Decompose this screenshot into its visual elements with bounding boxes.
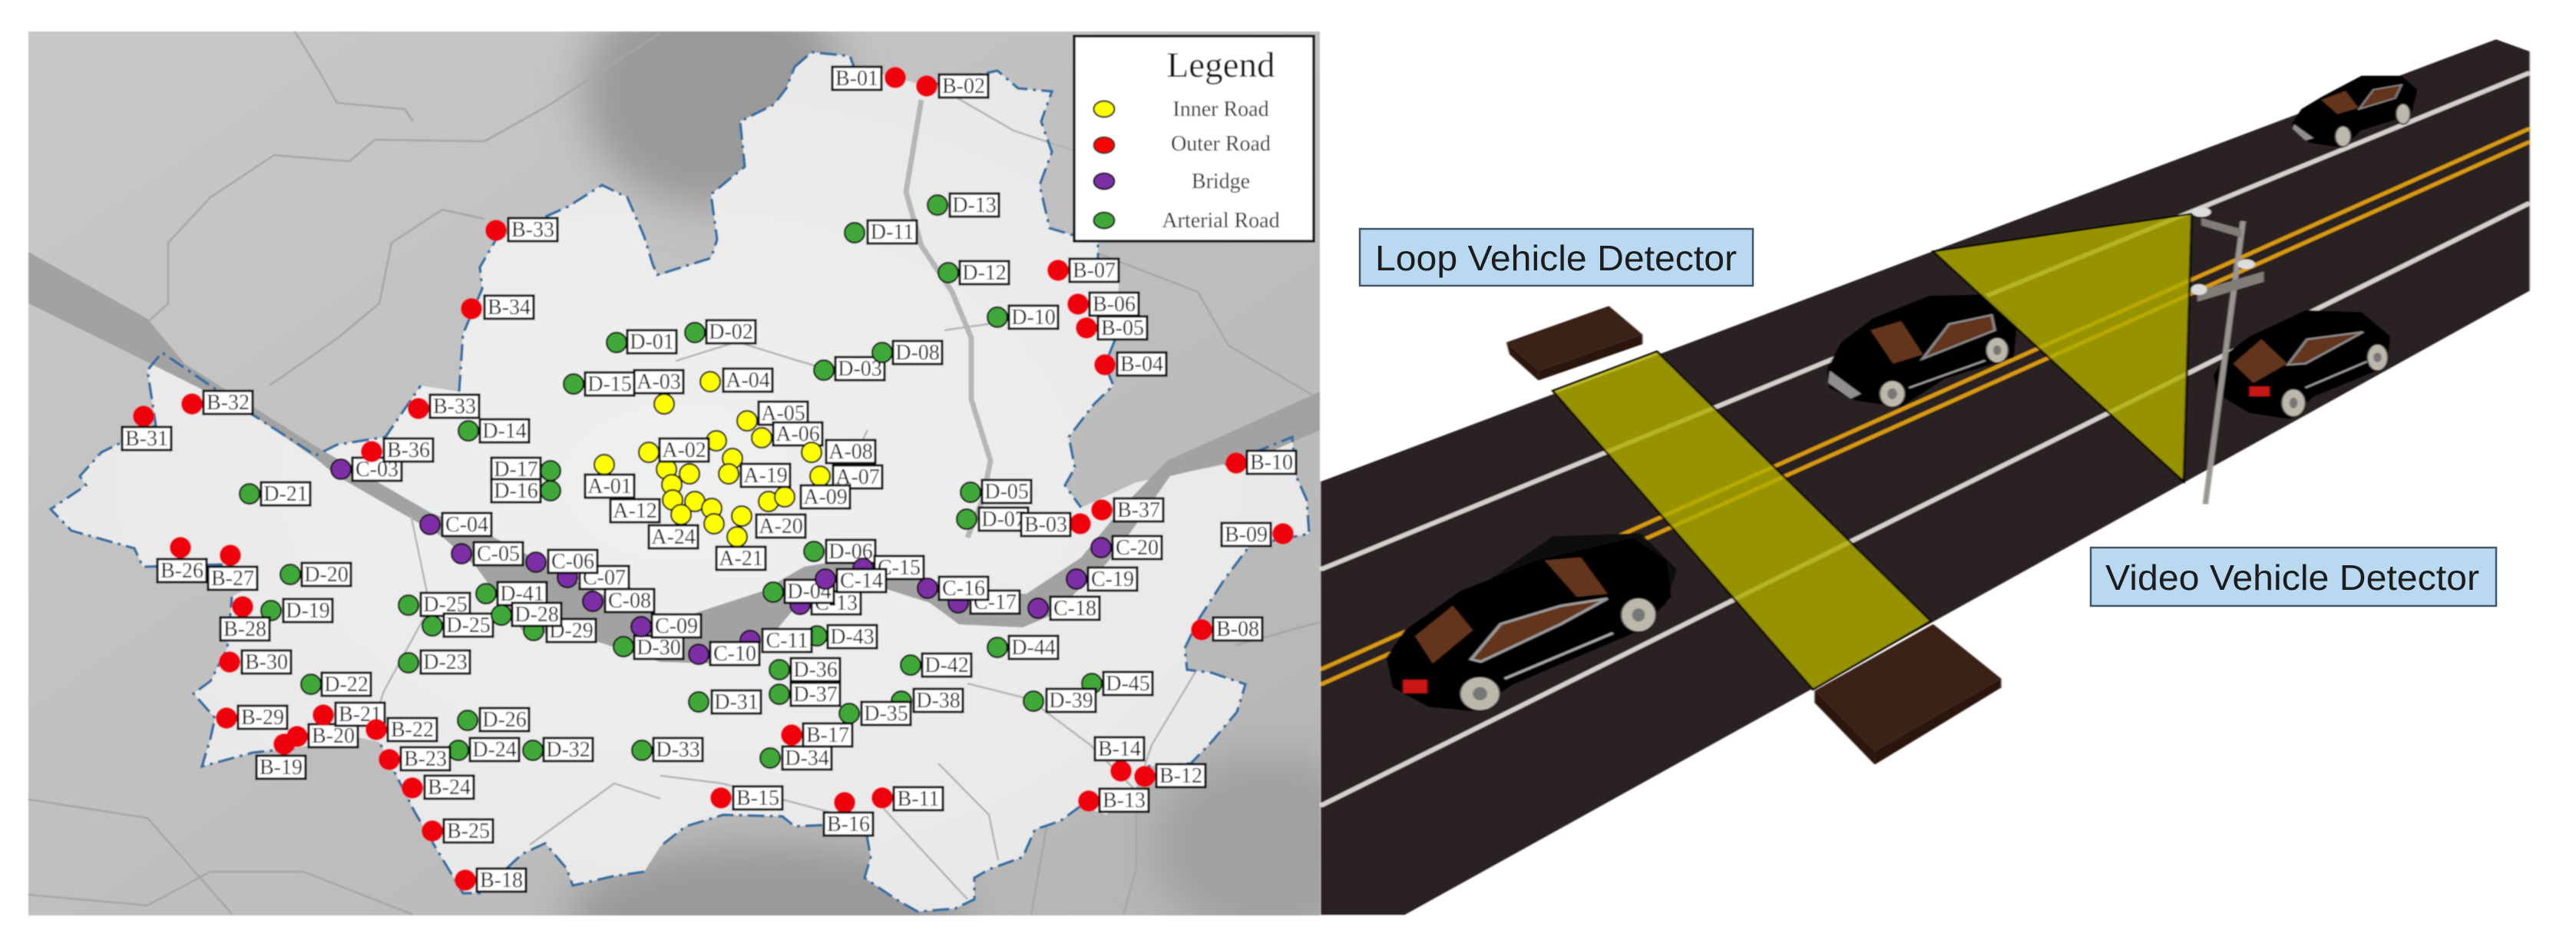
D-31: [689, 690, 761, 714]
D-25: D-25: [423, 593, 468, 617]
A-07: [810, 465, 882, 489]
D-33: [632, 738, 703, 762]
panel: road detector diagram: [1321, 39, 2530, 915]
B-01: B-01: [835, 67, 878, 91]
B-24: [402, 776, 474, 799]
B-10: [1225, 451, 1296, 475]
D-42: [901, 654, 971, 677]
A-07: A-07: [835, 465, 880, 489]
B-03: B-03: [1024, 513, 1067, 537]
B-15: B-15: [736, 786, 779, 810]
B-20: B-20: [312, 724, 355, 748]
D-41: D-41: [500, 582, 544, 606]
B-02: B-02: [942, 74, 985, 98]
D-30: D-30: [637, 636, 681, 660]
B-13: [1078, 789, 1149, 813]
D-34: D-34: [785, 746, 829, 770]
B-27: B-27: [211, 567, 254, 591]
C-06: C-06: [551, 550, 594, 574]
C-06: [526, 550, 597, 574]
D-41: [476, 582, 547, 606]
A-20: [732, 506, 805, 538]
C-04: [420, 513, 491, 537]
B-34: [461, 296, 534, 319]
B-19: [256, 733, 306, 780]
A-20: A-20: [759, 515, 803, 538]
D-38: D-38: [916, 689, 961, 713]
C-03: C-03: [355, 458, 398, 482]
B-28: B-28: [223, 617, 266, 641]
B-14: [1095, 737, 1144, 782]
D-15: [564, 372, 634, 396]
legend: outer road: [1093, 132, 1271, 156]
car: top far lane: [2291, 76, 2418, 147]
inner roads: [369, 97, 1198, 899]
B-31: [122, 405, 171, 451]
B-33: [485, 218, 557, 242]
D-39: D-39: [1049, 689, 1093, 713]
C-05: C-05: [477, 542, 520, 566]
D-23: D-23: [423, 650, 468, 674]
D-11: [845, 220, 917, 244]
D-19: [261, 599, 332, 623]
B-23: B-23: [404, 747, 447, 771]
B-10: B-10: [1250, 451, 1293, 475]
B-12: B-12: [1159, 764, 1202, 788]
D-05: D-05: [984, 480, 1029, 504]
B-04: B-04: [1120, 353, 1163, 376]
B-36: B-36: [387, 439, 430, 462]
label: Video Vehicle Detector: Video Vehicle Detector: [2105, 558, 2479, 597]
A-05: [737, 402, 808, 431]
D-11: D-11: [871, 220, 914, 244]
C-08: [583, 589, 654, 613]
panel: Seoul detector map: [28, 0, 1382, 950]
D-26: D-26: [482, 708, 527, 732]
C-20: [1091, 536, 1162, 560]
B-37: [1091, 498, 1163, 522]
D-08: D-08: [895, 341, 940, 365]
B-26: [157, 537, 207, 583]
C-17: C-17: [974, 591, 1017, 614]
B-19: B-19: [260, 756, 303, 780]
D-45: D-45: [1106, 672, 1150, 696]
B-20: [286, 724, 358, 748]
C-20: C-20: [1116, 536, 1159, 560]
B-03: [1021, 513, 1091, 537]
B-18: [455, 869, 526, 892]
C-15: C-15: [878, 556, 921, 580]
C-11: [740, 629, 812, 653]
B-15: [710, 786, 782, 810]
D-12: D-12: [962, 261, 1007, 285]
D-23: [398, 650, 470, 674]
legend title: Legend: [1167, 45, 1275, 85]
C-17: [948, 591, 1020, 614]
D-36: D-36: [793, 658, 838, 682]
B-07: [1047, 259, 1119, 283]
B-05: [1076, 316, 1147, 340]
B-33 lower: [408, 395, 479, 419]
C-13: [790, 591, 861, 615]
B-22: B-22: [391, 718, 434, 742]
D-06: [804, 540, 875, 564]
D-12: [938, 261, 1009, 285]
B-04: [1094, 353, 1166, 376]
loop detector cabinet, far side: [1506, 306, 1642, 380]
B-30: B-30: [245, 650, 288, 674]
C-09: C-09: [655, 614, 698, 638]
Seoul area: [51, 52, 1309, 912]
D-01: D-01: [630, 330, 674, 354]
B-16: B-16: [827, 813, 870, 836]
B-34: B-34: [488, 296, 531, 319]
B-06: B-06: [1093, 293, 1136, 316]
C-18: C-18: [1053, 597, 1096, 621]
A-08: A-08: [828, 440, 873, 464]
C-05: [451, 542, 523, 566]
D-37: D-37: [793, 683, 838, 707]
D-22: D-22: [324, 673, 369, 697]
D-39: [1023, 689, 1096, 713]
B-14: B-14: [1098, 737, 1141, 761]
C-14: [815, 569, 886, 593]
D-13: [928, 194, 999, 217]
detection zone: loop: [1553, 352, 1931, 690]
legend: arterial road: Arterial Road: [1162, 209, 1280, 233]
C-16: C-16: [942, 577, 985, 601]
D-35: [839, 702, 911, 726]
D-34: [760, 746, 832, 770]
D-20: [280, 563, 351, 587]
A-05: A-05: [761, 402, 805, 425]
B-05: B-05: [1101, 316, 1144, 340]
D-32: [523, 738, 593, 762]
D-16: D-16: [494, 479, 538, 503]
C-19: [1066, 568, 1137, 591]
C-04: C-04: [445, 513, 488, 537]
D-25: [398, 593, 470, 617]
A-19: A-19: [743, 464, 788, 488]
D-44: [987, 636, 1058, 660]
D-25 second: [422, 614, 493, 637]
B-31: B-31: [125, 427, 168, 451]
D-37: [769, 683, 840, 707]
C-11: C-11: [766, 629, 808, 653]
D-15: D-15: [587, 372, 632, 396]
D-07: [957, 508, 1028, 531]
A-21: [716, 527, 766, 571]
B-18: B-18: [480, 869, 523, 892]
B-17: B-17: [806, 723, 849, 747]
B-08: [1191, 617, 1262, 641]
A-08: [802, 440, 875, 464]
C-18: [1028, 597, 1100, 621]
D-17: D-17: [494, 458, 538, 482]
D-19: D-19: [286, 599, 330, 623]
label: Loop Vehicle Detector: Loop Vehicle Detector: [1375, 238, 1737, 278]
A-06: A-06: [775, 422, 820, 446]
legend: arterial road: [1093, 209, 1280, 233]
B-30: [219, 650, 291, 674]
D-28: D-28: [514, 603, 559, 627]
car: right lane: [2214, 310, 2390, 419]
D-32: D-32: [546, 738, 590, 762]
D-25 second: D-25: [446, 614, 491, 637]
D-29: D-29: [549, 619, 594, 643]
A-06: [752, 422, 822, 448]
C-19: C-19: [1091, 568, 1134, 591]
C-10: C-10: [713, 642, 756, 666]
D-38: [891, 689, 963, 713]
B-33 lower: B-33: [433, 395, 476, 419]
legend: inner road: Inner Road: [1172, 98, 1269, 121]
C-14: C-14: [840, 569, 883, 593]
A-02: [660, 431, 726, 462]
C-07: C-07: [583, 566, 626, 590]
D-04 label: D-04: [787, 580, 832, 604]
B-12: [1134, 764, 1205, 788]
label: Loop Vehicle Detector: [1360, 229, 1753, 286]
D-29: [524, 619, 596, 643]
A-12: A-12: [613, 499, 657, 523]
B-17: [781, 723, 852, 747]
D-03: [814, 357, 885, 381]
B-02: [916, 74, 988, 98]
A-01: [585, 455, 634, 498]
B-36: [361, 439, 433, 462]
car: foreground: [1387, 533, 1677, 711]
A-04: [700, 369, 772, 392]
A-04: A-04: [726, 369, 770, 392]
D-14: [458, 419, 529, 443]
legend: outer road: Outer Road: [1171, 132, 1271, 156]
legend: bridge: Bridge: [1192, 170, 1250, 194]
A-21: A-21: [719, 547, 763, 571]
B-11: [871, 787, 943, 811]
B-06: [1067, 293, 1139, 316]
A-02: A-02: [662, 439, 706, 462]
B-32: B-32: [207, 391, 250, 415]
B-27: [208, 545, 257, 591]
D-36: [769, 658, 840, 682]
B-28: [220, 596, 270, 641]
B-16: [824, 792, 873, 836]
D-33: D-33: [656, 738, 700, 762]
B-01: [832, 67, 906, 91]
B-25: B-25: [447, 819, 490, 843]
D-30: [613, 636, 683, 660]
B-29: [216, 706, 287, 730]
D-13: D-13: [952, 194, 997, 217]
B-09: B-09: [1225, 523, 1268, 547]
A-03: A-03: [637, 370, 681, 394]
C-07: [557, 566, 629, 590]
label: Video Vehicle Detector: [2091, 548, 2496, 606]
D-28: [491, 603, 561, 627]
D-08: [872, 341, 942, 365]
D-43: D-43: [830, 625, 875, 649]
B-07: B-07: [1073, 259, 1116, 283]
D-02: D-02: [709, 320, 753, 344]
road surface: [1321, 39, 2530, 915]
B-33: B-33: [511, 218, 554, 242]
D-14: D-14: [482, 419, 527, 443]
video detector pole and cameras: [2191, 207, 2264, 504]
D-06: D-06: [828, 540, 873, 564]
B-23: [379, 747, 450, 771]
A-03: [634, 370, 683, 414]
D-24: D-24: [472, 738, 517, 762]
A-19: [719, 464, 790, 488]
D-44: D-44: [1011, 636, 1056, 660]
legend: inner road: [1093, 98, 1269, 121]
D-07: D-07: [981, 508, 1026, 531]
B-08: B-08: [1216, 617, 1259, 641]
C-15: [853, 556, 924, 580]
D-05: [961, 480, 1031, 504]
B-13: B-13: [1103, 789, 1146, 813]
D-10: [987, 306, 1058, 329]
D-20: D-20: [304, 563, 349, 587]
D-02: [685, 320, 756, 344]
D-24: [448, 738, 519, 762]
D-04 marker: [763, 582, 783, 602]
C-03: [331, 458, 402, 482]
outside roads: [28, 31, 1320, 915]
D-10: D-10: [1011, 306, 1056, 329]
D-45: [1082, 672, 1152, 696]
D-26: [458, 708, 529, 732]
Seoul boundary dash-dot line: [51, 52, 1309, 912]
B-21: [312, 703, 385, 727]
legend: [1074, 36, 1314, 241]
A-24: A-24: [651, 525, 696, 549]
D-31: D-31: [714, 690, 759, 714]
D-22: [301, 673, 371, 697]
B-24: B-24: [428, 776, 471, 799]
D-16: [491, 479, 561, 503]
lane markings: [1321, 73, 2530, 806]
A-09: [775, 485, 850, 509]
C-09: [631, 614, 701, 638]
A-01: A-01: [587, 475, 632, 498]
B-09: [1222, 523, 1294, 547]
D-03: D-03: [838, 357, 882, 381]
B-21: B-21: [339, 703, 382, 727]
B-11: B-11: [898, 787, 939, 811]
car: middle lane: [1827, 294, 2017, 407]
A-09: A-09: [803, 485, 848, 509]
D-35: D-35: [864, 702, 908, 726]
legend: bridge: [1093, 170, 1250, 194]
Han River: [28, 252, 1320, 664]
C-08: C-08: [608, 589, 651, 613]
D-42: D-42: [924, 654, 969, 677]
detection zone: video: [1933, 214, 2192, 482]
B-32: [181, 391, 253, 415]
C-16: [918, 577, 988, 601]
D-43: [807, 625, 877, 649]
D-17: [491, 458, 561, 482]
C-10: [689, 642, 759, 666]
D-21: D-21: [263, 482, 308, 506]
C-13: C-13: [815, 591, 858, 615]
loop detector cabinet, near side: [1814, 624, 2001, 765]
B-25: [422, 819, 493, 843]
D-21: [240, 482, 310, 506]
D-01: [607, 330, 676, 354]
B-29: B-29: [241, 706, 284, 730]
B-22: [365, 718, 437, 742]
unlabelled inner road markers: [639, 442, 779, 534]
B-37: B-37: [1117, 498, 1160, 522]
map background: [28, 31, 1320, 915]
B-26: B-26: [160, 559, 203, 583]
